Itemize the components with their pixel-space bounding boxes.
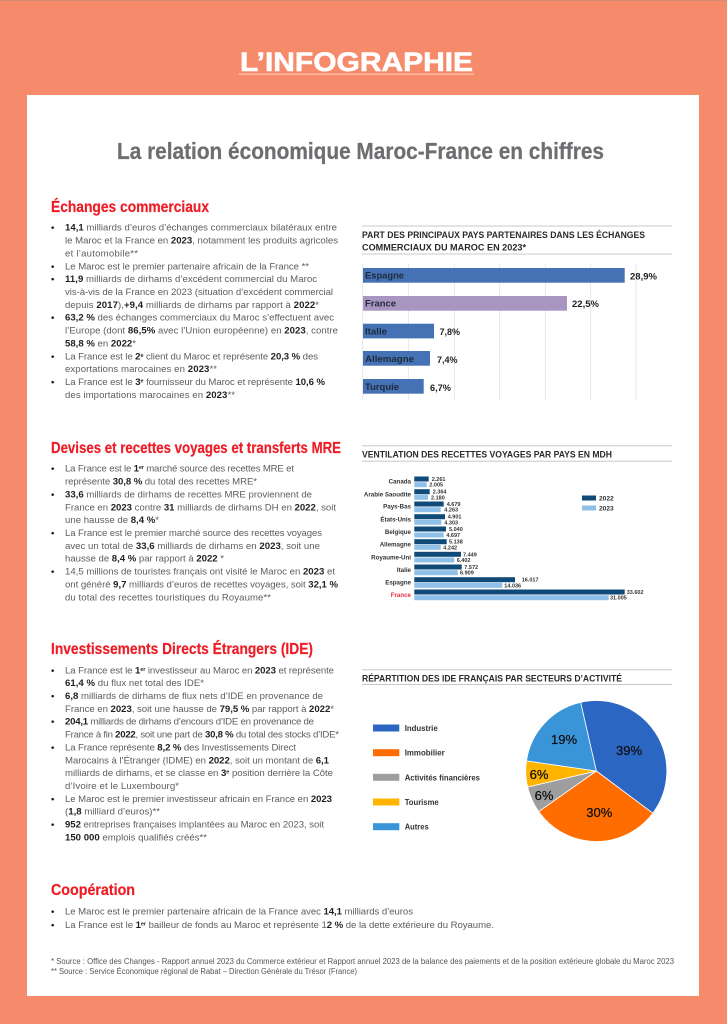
footnotes: sources: ** Source : Service Économique régional de Rabat – Direction Générale du Trésor (France) xyxy=(51,967,357,976)
text block: devises bullets: La France est le 1 xyxy=(65,464,139,475)
text block: coopération bullets: bailleur de fonds au Maroc et représente 1 xyxy=(146,920,327,931)
text block: IDE bullets: • xyxy=(51,717,55,728)
text block: échanges bullets: client du Maroc et représente xyxy=(143,351,271,362)
row: Arabie Saoudite xyxy=(364,489,447,501)
bar: Allemagne xyxy=(363,351,458,366)
legend: secteurs: Immobilier xyxy=(405,749,445,758)
text block: devises bullets: une hausse de 8,4 %* xyxy=(65,515,159,526)
text block: IDE bullets: d’Ivoire et le Luxembourg* xyxy=(65,781,179,792)
pie labels: 6% xyxy=(535,788,554,803)
bar: Italie: Italie xyxy=(365,326,387,337)
text block: IDE bullets xyxy=(51,665,339,844)
text block: IDE bullets: er xyxy=(140,667,146,673)
heading: IDE: Investissements Directs Étrangers (IDE) xyxy=(51,641,313,658)
text block: devises bullets: La France est le premier marché source des recettes voyages xyxy=(65,528,322,539)
row: France xyxy=(391,590,644,602)
text block: échanges bullets: l’Europe (dont 86,5% avec l’Union européenne) en 2023, contre xyxy=(65,326,338,337)
row: Allemagne: 5.138 xyxy=(449,540,463,546)
bar: Italie xyxy=(363,324,461,338)
row: Italie: Italie xyxy=(397,567,412,574)
text block: IDE bullets: • xyxy=(51,820,55,831)
legend: secteurs: Activités financières xyxy=(405,773,481,782)
pie chart xyxy=(526,701,667,841)
text block: devises bullets xyxy=(51,464,338,603)
row: Pays-Bas xyxy=(383,502,460,514)
main heading: La relation économique Maroc-France en chiffres xyxy=(117,138,604,164)
row: États-Unis: 4.303 xyxy=(444,520,458,526)
section: échanges commerciaux xyxy=(51,199,338,401)
bar: Espagne: 28,9% xyxy=(630,272,658,282)
text block: IDE bullets: 61,4 % du flux net total des IDE* xyxy=(65,678,204,689)
text block: échanges bullets: 20,3 % des xyxy=(271,351,318,362)
row: Arabie Saoudite: 2.180 xyxy=(431,495,445,501)
text block: IDE bullets: La France représente 8,2 % des Investissements Direct xyxy=(65,742,296,754)
text block: IDE bullets: • xyxy=(51,665,55,676)
heading: devises et recettes: Devises et recettes voyages et transferts MRE xyxy=(51,440,341,457)
text block: IDE bullets: France en 2023, soit une hausse de 79,5 % par rapport à 2022* xyxy=(65,704,334,715)
bar: France xyxy=(363,296,600,311)
row: France: France xyxy=(391,592,412,599)
text block: IDE bullets: 6,8 milliards de dirhams de flux nets d’IDE en provenance de xyxy=(65,691,323,702)
heading: échanges commerciaux: Échanges commerciaux xyxy=(51,199,209,216)
bar: Espagne xyxy=(363,268,658,283)
row: Royaume-Uni: Royaume-Uni xyxy=(371,554,411,561)
row: Italie xyxy=(397,564,478,577)
row: Belgique: Belgique xyxy=(385,529,412,536)
row: États-Unis: 4.901 xyxy=(448,515,461,521)
row: Pays-Bas: 4.263 xyxy=(444,508,458,514)
bar: Espagne: Espagne xyxy=(365,271,404,282)
row: Espagne: 16.017 xyxy=(522,578,539,584)
chart title: partenaires xyxy=(362,230,645,253)
text block: échanges bullets: 63,2 % des échanges commerciaux du Maroc s’effectuent avec xyxy=(65,313,334,324)
chart title: répartition IDE: RÉPARTITION DES IDE FRANÇAIS PAR SECTEURS D’ACTIVITÉ xyxy=(362,674,622,684)
text block: IDE bullets: • xyxy=(51,691,55,702)
row: Italie: 7.572 xyxy=(464,565,478,571)
text block: échanges bullets: et l’automobile** xyxy=(65,248,138,259)
row: France: 33.602 xyxy=(627,590,644,596)
section: coopération xyxy=(51,882,494,931)
row: États-Unis xyxy=(380,514,461,526)
heading: coopération: Coopération xyxy=(51,882,135,899)
text block: échanges bullets xyxy=(51,223,338,401)
legend: années xyxy=(582,495,614,512)
text block: IDE bullets: 150 000 emplois qualifiés créés** xyxy=(65,832,207,844)
pie labels: 19% xyxy=(551,732,577,747)
text block: coopération bullets: • xyxy=(51,906,55,918)
text block: devises bullets: ont généré 9,7 milliards d’euros de recettes voyages, soit 32,1 % xyxy=(65,579,338,590)
row: Pays-Bas: Pays-Bas xyxy=(383,504,412,511)
row: Royaume-Uni: 6.402 xyxy=(457,558,470,564)
text block: IDE bullets: • xyxy=(51,794,55,805)
text block: échanges bullets: 58,8 % en 2022* xyxy=(65,338,136,349)
text block: échanges bullets: e xyxy=(140,353,144,359)
chart title: partenaires: COMMERCIAUX DU MAROC EN 2023* xyxy=(362,243,527,253)
bar: Turquie: 6,7% xyxy=(430,383,452,394)
row: Espagne: 14.036 xyxy=(504,583,521,589)
text block: échanges bullets: • xyxy=(51,223,55,234)
text block: devises bullets: avec un total de 33,6 milliards de dirhams en 2023, soit une xyxy=(65,541,320,552)
row: Canada: Canada xyxy=(389,479,412,486)
row: Pays-Bas: 4.679 xyxy=(447,502,460,508)
row: Allemagne: Allemagne xyxy=(380,542,412,549)
text block: échanges bullets: • xyxy=(51,351,55,362)
chart title: recettes voyages: VENTILATION DES RECETTES VOYAGES PAR PAYS EN MDH xyxy=(362,449,612,459)
row: Allemagne xyxy=(380,539,463,551)
row: Belgique: 5.040 xyxy=(449,527,463,533)
text block: IDE bullets: France à fin 2022, soit une part de 30,8 % du total des stocks d’IDE* xyxy=(65,730,339,741)
row: Italie: 6.909 xyxy=(460,571,474,577)
text block: IDE bullets: Marocains à l’Étranger (IDME) en 2022, soit un montant de 6,1 xyxy=(65,755,330,766)
text block: IDE bullets: Le Maroc est le premier investisseur africain en France en 2023 xyxy=(65,794,332,805)
text block: échanges bullets: Le Maroc est le premier partenaire africain de la France ** xyxy=(65,261,309,272)
legend: secteurs: Industrie xyxy=(405,724,438,733)
footnotes: sources: * Source : Office des Changes - Rapport annuel 2023 du Commerce extérieur et Rapport annuel 2023 de la balance des paiements et de la position extérieure globale du Maroc 2023 xyxy=(51,957,675,966)
bar: Allemagne: Allemagne xyxy=(365,354,414,365)
text block: échanges bullets: La France est le 3 xyxy=(65,377,141,388)
chart: ventilation des recettes voyages xyxy=(362,445,672,602)
text block: devises bullets: hausse de 8,4 % par rapport à 2022 * xyxy=(65,554,224,565)
text block: coopération bullets: Le Maroc est le premier partenaire africain de la France avec 14,1 milliards d’euros xyxy=(65,906,413,918)
row: Canada xyxy=(389,476,445,489)
text block: IDE bullets: milliards de dirhams, et se classe en 3 xyxy=(65,768,226,779)
text block: échanges bullets: vis-à-vis de la France en 2023 (situation d’excédent commercial xyxy=(65,287,333,298)
chart title: partenaires: PART DES PRINCIPAUX PAYS PARTENAIRES DANS LES ÉCHANGES xyxy=(362,230,645,240)
row: France: 31.005 xyxy=(610,596,627,602)
text block: devises bullets: France en 2023 contre 31 milliards de dirhams DH en 2022, soit xyxy=(65,502,336,513)
row: Espagne: Espagne xyxy=(385,580,412,587)
bar: Allemagne: 7,4% xyxy=(437,355,458,366)
text block: échanges bullets: fournisseur du Maroc et représente xyxy=(143,377,296,388)
text block: échanges bullets: • xyxy=(51,377,55,388)
row: États-Unis: États-Unis xyxy=(380,515,412,523)
pie labels: 39% xyxy=(616,743,642,758)
row: Canada: 2.261 xyxy=(432,477,445,483)
text block: IDE bullets: 204,1 milliards de dirhams d’encours d’IDE en provenance de xyxy=(65,717,314,728)
text block: IDE bullets: position derrière la Côte xyxy=(229,768,333,779)
pie labels: 30% xyxy=(586,805,613,820)
bar: France: 22,5% xyxy=(572,299,600,310)
text block: devises bullets: 33,6 milliards de dirhams de recettes MRE proviennent de xyxy=(65,489,312,500)
row: Arabie Saoudite: 2.364 xyxy=(433,490,447,496)
legend: secteurs: Autres xyxy=(405,823,429,832)
legend: années: 2023 xyxy=(599,505,614,512)
row: Arabie Saoudite: Arabie Saoudite xyxy=(364,491,412,498)
text block: échanges bullets: e xyxy=(140,378,144,384)
text block: devises bullets: • xyxy=(51,567,55,578)
text block: devises bullets: • xyxy=(51,528,55,539)
text block: IDE bullets: • xyxy=(51,742,55,754)
row: Belgique: 4.697 xyxy=(446,533,460,539)
text block: coopération bullets: 2 % de la dette extérieure du Royaume. xyxy=(327,920,494,931)
text block: devises bullets: • xyxy=(51,489,55,500)
footnotes: sources xyxy=(51,957,675,976)
section: devises et recettes voyages xyxy=(51,440,341,603)
row: Espagne xyxy=(385,577,539,589)
text block: devises bullets: er xyxy=(139,465,145,471)
legend: secteurs: Tourisme xyxy=(405,798,439,807)
section: investissements directs étrangers xyxy=(51,641,339,844)
text block: devises bullets: 14,5 millions de touristes français ont visité le Maroc en 2023 et xyxy=(65,567,335,578)
row: Canada: 2.005 xyxy=(429,483,443,489)
text block: IDE bullets: e xyxy=(226,770,229,776)
text block: échanges bullets: des importations marocaines en 2023** xyxy=(65,390,235,401)
bar: France: France xyxy=(365,298,396,310)
text block: IDE bullets: La France est le 1 xyxy=(65,665,140,676)
text block: IDE bullets: 952 entreprises françaises implantées au Maroc en 2023, soit xyxy=(65,820,324,831)
legend: années: 2022 xyxy=(599,495,614,502)
chart: part des principaux pays partenaires xyxy=(362,226,672,400)
text block: échanges bullets: le Maroc et la France en 2023, notamment les produits agricoles xyxy=(65,236,338,247)
text block: devises bullets: du total des recettes touristiques du Royaume** xyxy=(65,592,271,603)
text block: devises bullets: représente 30,8 % du total des recettes MRE* xyxy=(65,477,257,488)
text block: devises bullets: marché source des recettes MRE et xyxy=(144,464,294,475)
row: Belgique xyxy=(385,526,463,539)
text block: coopération bullets: • xyxy=(51,920,55,931)
text block: échanges bullets: depuis 2017),+9,4 milliards de dirhams par rapport à 2022* xyxy=(65,300,319,311)
row: Royaume-Uni: 7.449 xyxy=(463,552,477,558)
text block: coopération bullets xyxy=(51,906,494,931)
text block: échanges bullets: • xyxy=(51,274,55,285)
text block: coopération bullets: er xyxy=(141,922,147,928)
chart: répartition des IDE français xyxy=(362,669,672,841)
banner title: L’INFOGRAPHIE xyxy=(240,47,473,77)
text block: échanges bullets: exportations marocaines en 2023** xyxy=(65,364,217,375)
text block: devises bullets: • xyxy=(51,464,55,475)
text block: échanges bullets: 11,9 milliards de dirhams d’excédent commercial du Maroc xyxy=(65,274,317,285)
bar: Italie: 7,8% xyxy=(440,327,461,338)
pie labels xyxy=(530,732,642,820)
text block: échanges bullets: 10,6 % xyxy=(295,377,325,388)
text block: IDE bullets: 2023 et représente xyxy=(255,665,334,676)
bar: Turquie: Turquie xyxy=(365,382,399,393)
legend: secteurs xyxy=(373,724,481,832)
bar: Turquie xyxy=(363,379,452,394)
text block: échanges bullets: 14,1 milliards d’euros d’échanges commerciaux bilatéraux entre xyxy=(65,223,337,234)
text block: IDE bullets: investisseur au Maroc en xyxy=(145,665,255,676)
row: Royaume-Uni xyxy=(371,552,477,564)
text block: échanges bullets: • xyxy=(51,261,55,272)
text block: échanges bullets: • xyxy=(51,313,55,324)
row: Allemagne: 4.242 xyxy=(443,545,457,551)
text block: échanges bullets: La France est le 2 xyxy=(65,351,141,362)
text block: coopération bullets: La France est le 1 xyxy=(65,920,141,931)
pie labels: 6% xyxy=(530,767,549,782)
text block: IDE bullets: (1,8 milliard d’euros)** xyxy=(65,807,160,818)
